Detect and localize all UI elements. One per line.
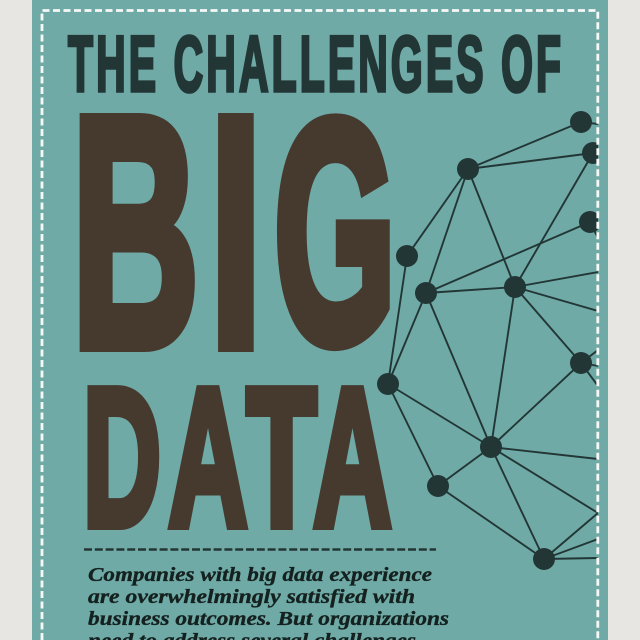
heading: DATA: T	[247, 348, 317, 567]
intro text	[88, 564, 449, 640]
heading: DATA: D	[83, 348, 161, 567]
network graph illustration	[377, 111, 604, 570]
heading: DATA: A	[314, 348, 392, 567]
heading: DATA: A	[168, 348, 248, 567]
heading: BIG: I	[209, 50, 262, 415]
intro text: business outcomes. But organizations	[88, 608, 449, 630]
text: G	[274, 55, 396, 408]
title: the challenges of: THE CHALLENGES OF	[68, 21, 564, 109]
intro text: are overwhelmingly satisfied with	[88, 586, 415, 608]
heading: BIG: B	[72, 50, 199, 415]
intro text: Companies with big data experience	[88, 564, 432, 586]
heading: DATA	[83, 348, 392, 567]
dashed divider	[84, 548, 436, 551]
